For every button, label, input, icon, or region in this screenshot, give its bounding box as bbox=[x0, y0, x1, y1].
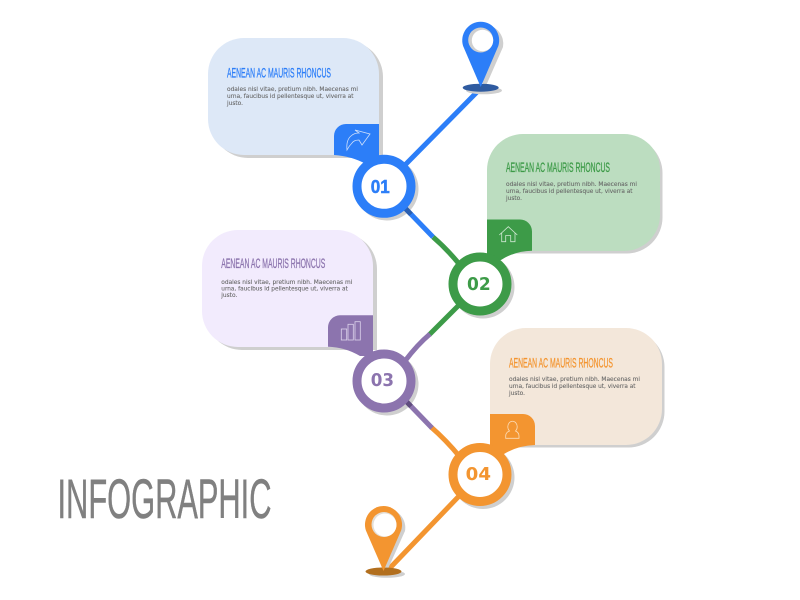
icon tab: person bbox=[490, 414, 535, 456]
circle drop shadows bbox=[356, 158, 514, 509]
body text: urna, faucibus id pellentesque ut, viverra at bbox=[506, 187, 633, 195]
body text: justo. bbox=[508, 389, 525, 397]
connector line: step 04 to pin bbox=[388, 494, 461, 570]
body text: justo. bbox=[226, 99, 243, 107]
body text: odales nisl vitae, pretium nibh. Maecenas mi bbox=[509, 375, 640, 383]
icon tab: house bbox=[487, 220, 532, 262]
panel: card 03 bbox=[202, 230, 377, 356]
panel: card 04 bbox=[490, 328, 665, 456]
step 04 circle: 04 bbox=[466, 464, 491, 485]
heading: AENEAN AC MAURIS RHONCUS bbox=[509, 356, 613, 370]
body text: urna, faucibus id pellentesque ut, viverra at bbox=[221, 284, 348, 292]
heading: AENEAN AC MAURIS RHONCUS bbox=[221, 256, 325, 271]
icon: bottom location pin bbox=[365, 506, 405, 578]
connector line: step 03 to step 04 bbox=[404, 399, 460, 457]
body text: urna, faucibus id pellentesque ut, viverra at bbox=[227, 92, 354, 100]
body text bbox=[505, 180, 637, 202]
connector line: step 01 to step 02 bbox=[404, 207, 460, 265]
connector line: step 02 to step 03 bbox=[405, 304, 460, 361]
step 01 circle bbox=[357, 159, 411, 213]
body text: odales nisl vitae, pretium nibh. Maecenas mi bbox=[506, 180, 637, 188]
heading: AENEAN AC MAURIS RHONCUS bbox=[227, 66, 331, 80]
body text: odales nisl vitae, pretium nibh. Maecenas mi bbox=[227, 85, 358, 93]
step 02 circle bbox=[453, 257, 507, 311]
body text bbox=[220, 278, 352, 299]
body text: justo. bbox=[505, 194, 522, 202]
step 03 circle: 03 bbox=[371, 370, 394, 391]
step 03 circle bbox=[357, 354, 411, 408]
body text: odales nisl vitae, pretium nibh. Maecenas mi bbox=[221, 278, 352, 286]
panel: card 02 bbox=[487, 134, 663, 262]
body text: urna, faucibus id pellentesque ut, viverra at bbox=[509, 382, 636, 390]
body text bbox=[226, 85, 358, 107]
icon tab: bar chart bbox=[328, 315, 373, 356]
icon tab: share arrow bbox=[334, 124, 379, 164]
body text bbox=[508, 375, 640, 397]
step 04 circle bbox=[453, 448, 507, 502]
icon: top location pin bbox=[462, 22, 503, 94]
body text: justo. bbox=[220, 291, 237, 299]
connector line: pin to step 01 bbox=[405, 90, 479, 165]
heading: AENEAN AC MAURIS RHONCUS bbox=[506, 160, 610, 175]
step 01 circle: 01 bbox=[371, 176, 390, 197]
step 02 circle: 02 bbox=[467, 274, 491, 295]
panel: card 01 bbox=[208, 38, 383, 164]
title: INFOGRAPHIC bbox=[58, 467, 272, 530]
